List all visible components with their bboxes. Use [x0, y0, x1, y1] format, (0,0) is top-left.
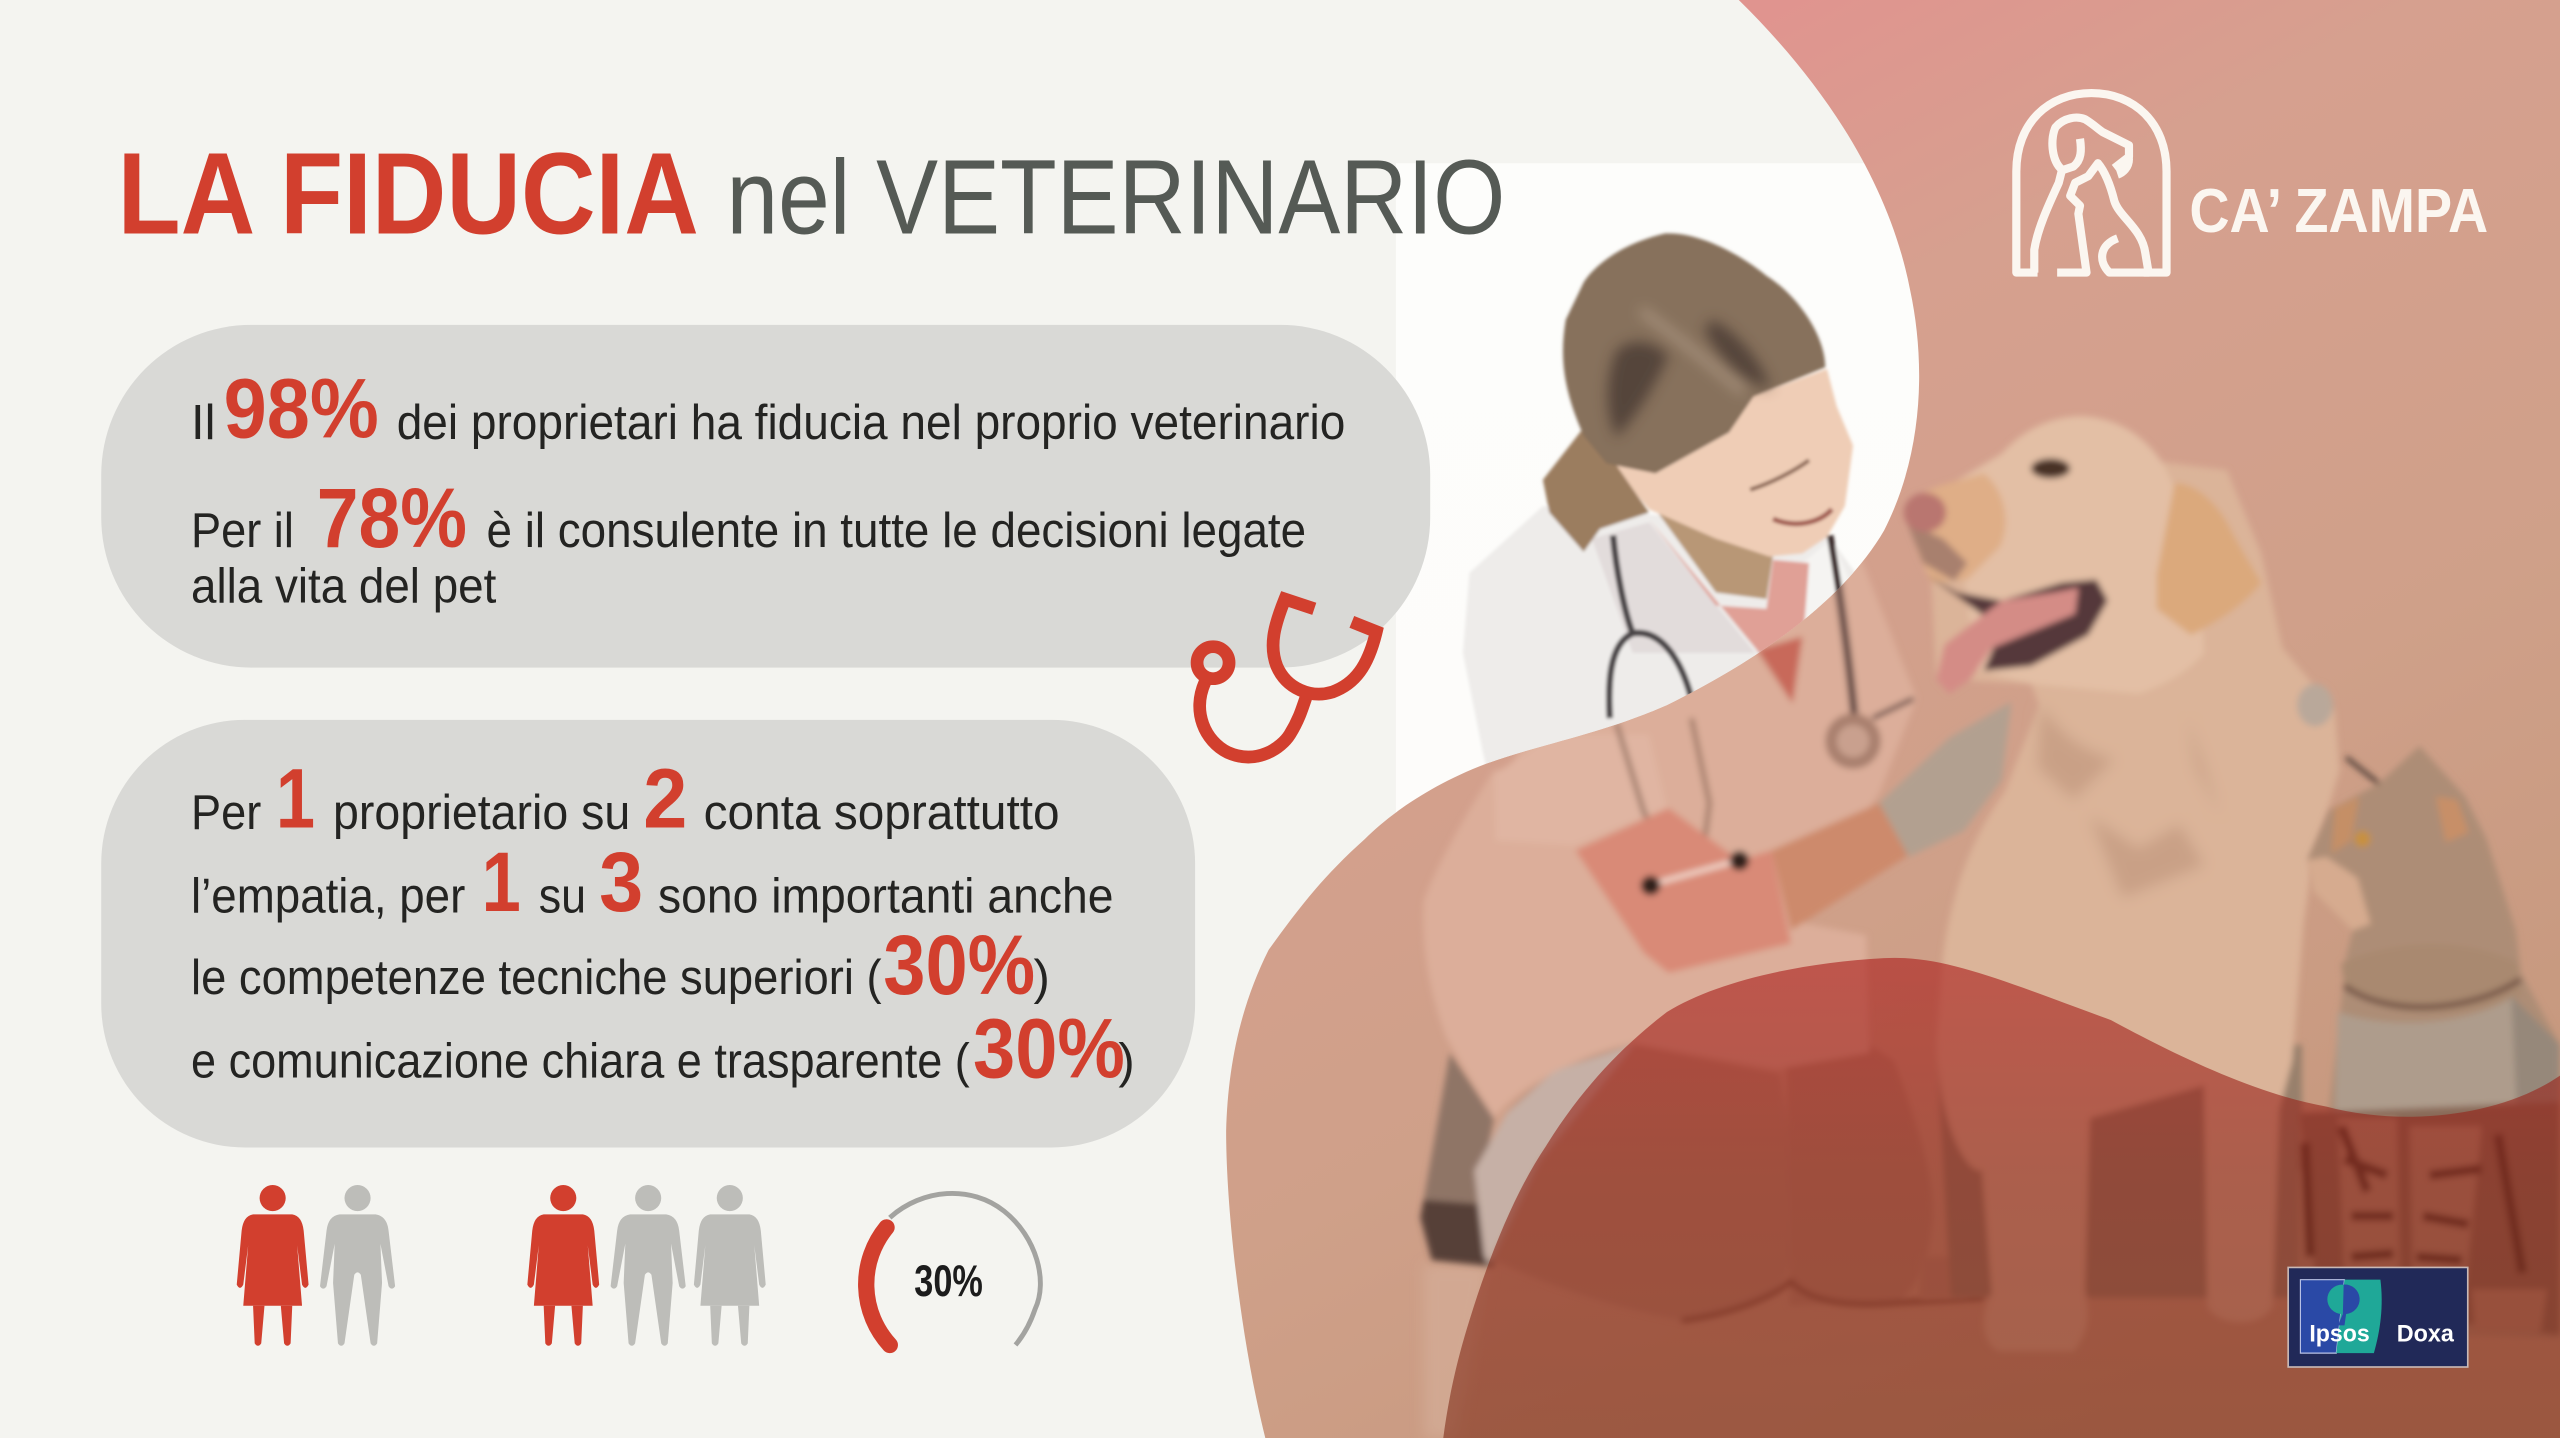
glove — [1879, 702, 2011, 857]
dark red curved overlay — [1443, 958, 2560, 1438]
logo: Ca' Zampa — [2016, 93, 2488, 273]
cat front legs — [2338, 1118, 2482, 1289]
photo white backdrop — [1396, 163, 1951, 1371]
dog rear paw — [1920, 1257, 1967, 1299]
shoe — [1420, 1200, 1494, 1267]
cat ear — [2436, 797, 2469, 842]
panel: empathy: 30% — [973, 1000, 1125, 1095]
cat stripes — [2305, 1126, 2522, 1273]
photo: dog — [1904, 416, 2340, 1351]
stethoscope tubes — [1612, 723, 1650, 820]
hair highlight — [1641, 310, 1744, 392]
logo: Ipsos Doxa: Ipsos — [2309, 1321, 2370, 1348]
trousers light part — [1474, 1045, 1634, 1265]
panel: empathy — [101, 720, 1195, 1147]
title — [118, 128, 1505, 258]
photo: cat — [2299, 746, 2560, 1338]
neck — [1656, 509, 1773, 599]
eye and mouth — [1750, 460, 1809, 490]
floor reflection — [1424, 1265, 1489, 1438]
knee shadows — [1682, 1281, 1984, 1320]
long sleeve — [1576, 808, 1791, 973]
dog head — [1953, 416, 2204, 694]
panel: empathy: ) — [1118, 1034, 1135, 1088]
second knee — [1793, 1062, 1850, 1084]
text: 98%: Il — [191, 396, 216, 450]
panel: empathy: proprietario su — [333, 786, 630, 840]
coat shade — [1592, 522, 1755, 653]
trousers — [1474, 1045, 1792, 1320]
hair — [1563, 233, 1825, 473]
cat eye — [2354, 831, 2371, 847]
dog collar tag — [2297, 684, 2333, 726]
coat body — [1423, 522, 1917, 1118]
icon: stethoscope — [1197, 599, 1376, 757]
ponytail — [1543, 428, 1649, 552]
face — [1610, 369, 1853, 557]
icon: dog and cat arch — [2016, 93, 2167, 273]
cat body — [2299, 746, 2560, 1338]
dog muzzle — [1905, 473, 2006, 583]
cat rear paw — [2472, 1289, 2547, 1332]
panel: trust: dei proprietari ha fiducia nel proprio veterinario — [397, 396, 1345, 450]
text line 4: e comunicazione chiara e trasparente ( — [191, 1034, 970, 1088]
boot — [1421, 1053, 1496, 1206]
pink collar — [1658, 530, 1810, 654]
cuffs — [1651, 860, 1739, 885]
dog eye — [2031, 459, 2070, 478]
V neck — [1757, 637, 1802, 703]
text: 78%: Per il — [191, 504, 294, 558]
title: nel VETERINARIO — [727, 138, 1505, 256]
hair shadow — [1608, 320, 1770, 437]
text line 2: l’empatia, per — [191, 869, 465, 923]
cat ear line — [2346, 757, 2379, 783]
logo: Ipsos Doxa — [2288, 1267, 2468, 1367]
chart: 30% gauge — [866, 1193, 1040, 1345]
stethoscope — [1609, 535, 1693, 718]
logo: Ca' Zampa: CA’ ZAMPA — [2189, 177, 2488, 246]
photo: veterinarian tinted lower body — [1420, 522, 2011, 1320]
text line 1: Per — [191, 786, 261, 840]
cat tail — [2511, 996, 2560, 1126]
panel: empathy: 1 — [276, 751, 315, 846]
dog dark fur — [1936, 1045, 2302, 1298]
icon: 1 of 2 people — [237, 1185, 395, 1346]
cat muzzle — [2307, 857, 2371, 930]
panel: empathy: su — [539, 869, 586, 923]
icon: Ipsos head — [2300, 1280, 2344, 1353]
chart: 30% gauge: 30% — [914, 1257, 983, 1306]
panel: empathy: ) — [1033, 951, 1050, 1005]
cat collar line — [2344, 979, 2521, 1007]
title: LA FIDUCIA — [118, 128, 699, 258]
panel: trust — [101, 325, 1430, 668]
panel: trust: è il consulente in tutte le decisioni legate — [487, 504, 1306, 558]
dog tongue — [1936, 588, 2078, 694]
panel: trust: alla vita del pet — [191, 559, 497, 613]
cat forehead — [2331, 797, 2359, 854]
cat ruff — [2341, 945, 2521, 1013]
cat lower body — [2299, 1102, 2560, 1335]
panel: empathy: sono importanti anche — [658, 869, 1113, 923]
pink curved shape — [1226, 0, 2560, 1438]
dog body — [1905, 416, 2340, 1351]
inner coat right — [1802, 539, 1861, 645]
icon: 1 of 3 people — [527, 1185, 766, 1346]
coat sleeve — [1499, 741, 1648, 808]
panel: empathy: 3 — [599, 834, 643, 929]
panel: empathy: conta soprattutto — [704, 786, 1060, 840]
dog chest fur shading — [2038, 705, 2220, 898]
dog ear — [2157, 483, 2261, 635]
panel: empathy: 2 — [643, 751, 687, 846]
white coat — [1463, 506, 1854, 764]
chest piece — [1825, 713, 1881, 769]
dog nose — [1904, 493, 1946, 532]
forearm — [1771, 803, 1909, 930]
panel: empathy: 1 — [482, 834, 521, 929]
panel: empathy: 30% — [883, 917, 1035, 1012]
text line 3: le competenze tecniche superiori ( — [191, 951, 882, 1005]
logo: Ipsos Doxa: Doxa — [2397, 1321, 2454, 1348]
dog lower muzzle shade — [1907, 522, 1967, 581]
cat chest — [2335, 996, 2522, 1118]
panel: trust: 98% — [224, 360, 379, 455]
panel: trust: 78% — [317, 470, 467, 565]
dog mouth — [1927, 575, 2108, 671]
photo: veterinarian upper body in natural colour — [1463, 231, 1854, 764]
